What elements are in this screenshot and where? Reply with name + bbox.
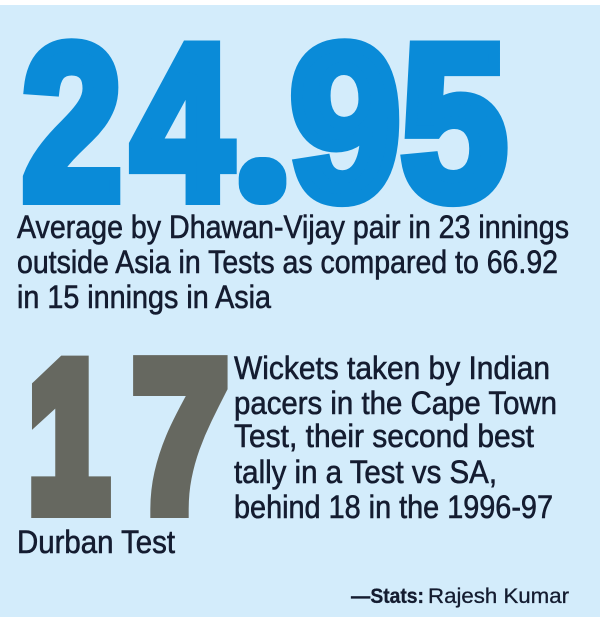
text block: wickets description: pacers in the Cape Town (234, 385, 557, 421)
credit line (351, 585, 569, 608)
text block: wickets description (234, 350, 557, 525)
text block: wickets description: behind 18 in the 1996-97 (234, 489, 553, 525)
big number: 17: 7 (133, 317, 228, 555)
big number: 24.95: . (257, 149, 268, 193)
big number: 17 (29, 317, 228, 555)
text block: wickets description: Test, their second best (234, 418, 534, 454)
big number: 17: 1 (29, 322, 108, 552)
text block: average description (17, 209, 569, 315)
big number: 24.95 (22, 0, 507, 246)
text block: average description: in 15 innings in Asia (17, 279, 271, 315)
big number: 24.95: 5 (401, 0, 507, 245)
credit line: Rajesh Kumar (428, 585, 569, 608)
big number: 24.95: 2 (22, 0, 122, 245)
text block: Durban Test: Durban Test (17, 524, 175, 560)
big number: 24.95: 4 (132, 0, 232, 245)
credit line: —Stats: (351, 585, 424, 608)
text block: wickets description: tally in a Test vs SA, (234, 454, 497, 490)
text block: wickets description: Wickets taken by Indian (234, 350, 550, 386)
big number: 24.95: 9 (290, 0, 401, 246)
